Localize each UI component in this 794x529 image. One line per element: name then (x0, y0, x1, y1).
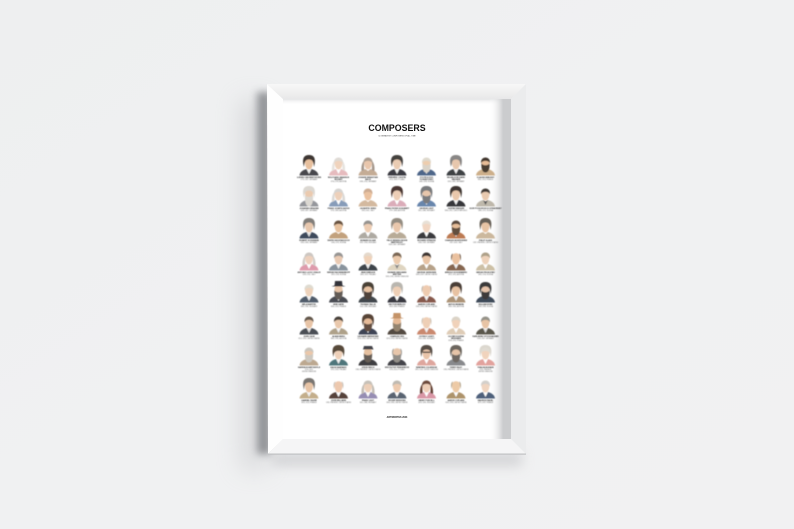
composer: Bernstein (357, 314, 379, 340)
composer: Berg: ALBAN BERG (332, 335, 345, 338)
composer: Maurice Ravel: 1875–1937, FRANCE (478, 401, 493, 404)
composer: Rachmaninoff (327, 252, 351, 276)
composer: Tchaikovsky: TCHAIKOVSKY (420, 178, 434, 181)
composer: Vivaldi (298, 252, 321, 276)
composer: Ives (386, 313, 408, 340)
composer: Verdi (358, 188, 378, 212)
composer: Schumann (299, 218, 319, 244)
composer: Liszt (417, 186, 436, 212)
composer: Schoenberg: ARNOLD SCHOENBERG (445, 271, 468, 274)
composer: Penderecki: KRZYSZTOF PENDERECKI (385, 367, 410, 369)
composer: Mendelssohn (387, 218, 408, 246)
composer: Ives: CHARLES IVES (390, 335, 405, 338)
composer: Stravinsky: IGOR FYODOROVICH STRAVINSKY (469, 207, 502, 210)
composer: Mozart: WOLFGANG AMADEUS (328, 176, 350, 179)
composer: Schoenberg (445, 253, 468, 276)
composer: Philip Glass: PHILIP GLASS (479, 239, 493, 242)
composer: Messiaen: OLIVIER EUGÈNE (448, 335, 465, 338)
composer: Aaron Copland portrait (445, 381, 467, 404)
composer: Gershwin: 1898–1937, UNITED STATES (416, 273, 437, 276)
composer: Stravinsky (469, 188, 502, 212)
composer: Sibelius: 1865–1957, FINLAND (360, 273, 377, 276)
composer: Satie: ERIK SATIE (333, 303, 344, 306)
composer: Schubert: 1797–1828, AUSTRIA (389, 209, 406, 212)
composer: Saariaho: KAIJA SAARIAHO (330, 366, 347, 369)
composer: Liszt: 1811–1886, HUNGARY (418, 209, 436, 212)
composer: Bach: BACH (365, 178, 371, 181)
composer: Elgar: EDWARD ELGAR (360, 239, 376, 242)
composer: Coleridge: 1875–1912, UNITED KINGDOM (415, 369, 439, 371)
composer: Prokofiev (476, 252, 496, 276)
composer: Beethoven (297, 155, 322, 181)
composer: Copland: AARON COPLAND (418, 303, 436, 306)
composer: Rachmaninoff: SERGEI RACHMANINOFF (327, 271, 351, 274)
composer: Tchaikovsky: 1840–1893, RUSSIA (419, 180, 435, 183)
composer: Prokofiev: SERGEI PROKOFIEV (476, 272, 496, 274)
composer: Musgrave (476, 345, 495, 373)
composer: Berg: 1885–1935, AUSTRIA (331, 337, 347, 340)
composer: Sessions (386, 380, 408, 404)
composer: Shostakovich: 1906–1975, RUSSIA (331, 241, 347, 244)
composer: Schumann: ROBERT SCHUMANN (299, 239, 319, 242)
composer: Tallis (358, 282, 378, 308)
composer: Ives: 1874–1954, UNITED STATES (386, 337, 408, 340)
composer: Purcell: 1659–1695, ENGLAND (418, 401, 436, 404)
composer: Mozart: 1756–1791, AUSTRIA (331, 180, 347, 183)
composer: John Cage: 1912–1992, UNITED STATES (298, 337, 320, 340)
composer: Mozart: MOZART (334, 178, 343, 181)
composer: Saariaho (329, 345, 348, 371)
composer: John Williams: JOHN WILLIAMS (331, 399, 347, 402)
composer: Liszt: GEORGE LISZT (419, 208, 434, 210)
composer: Shostakovich: DMITRI SHOSTAKOVICH (327, 239, 350, 242)
composer: Wagner: WILHELM RICHARD (447, 176, 466, 179)
composer: Schumann: 1810–1856, GERMANY (301, 241, 318, 244)
composer: Franz Liszt: FRANZ LISZT (362, 399, 375, 402)
composer: Strauss (417, 220, 436, 244)
composer: Birtwistle: 1934–2022, (305, 369, 314, 371)
composer: Britten: EDWARD BENJAMIN (388, 271, 407, 274)
frame: left bevel (267, 84, 283, 454)
composer: Prokofiev: 1891–1953, RUSSIA (478, 273, 494, 276)
composer: Schubert: FRANZ PETER SCHUBERT (385, 207, 410, 210)
composer: Gershwin (416, 252, 437, 276)
poster sheet (283, 99, 503, 439)
composer: Fauré: GABRIEL FAURÉ (301, 399, 317, 402)
composer: Bartok: 1881–1945, HUNGARY (301, 305, 318, 308)
composer: Britten: 1913–1976, UNITED KINGDOM (386, 276, 409, 278)
composer: Debussy: 1862–1918, FRANCE (478, 178, 493, 181)
composer: Copland (416, 285, 437, 308)
composer: Reich: 1936–PRESENT, UNITED STATES (355, 368, 381, 371)
composer: Byrd (476, 282, 495, 308)
composer: Mahler: GUSTAV MAHLER (448, 207, 465, 210)
composer: Birtwistle: HARRISON BIRTWISTLE (298, 366, 321, 369)
composer: Musgrave: UNITED KINGDOM (478, 371, 493, 373)
composer: Terry Riley: TERRY RILEY (450, 367, 463, 369)
composer: Monteverdi (445, 220, 468, 244)
composer: Stockhausen (472, 316, 499, 340)
composer: Franz Liszt (358, 380, 378, 404)
composer: Birtwistle: UNITED KINGDOM (302, 371, 317, 373)
composer: Messiaen (446, 316, 466, 342)
composer: Sibelius: JEAN SIBELIUS (361, 271, 376, 274)
composer: Bach (358, 158, 378, 183)
composer: Mendelssohn: BARTHOLDY (391, 241, 404, 244)
composer: Schoenberg: 1874–1951, AUSTRIA (448, 273, 465, 276)
composer: Berlioz (388, 282, 406, 308)
composer: Sibelius (358, 252, 378, 276)
composer: Webern: ANTON WEBERN (448, 303, 464, 306)
composer: Stockhausen: KARLHEINZ STOCKHAUSEN (472, 335, 499, 338)
composer: Britten: BRITTEN (393, 274, 402, 276)
composer: John Cage: JOHN CAGE (303, 335, 315, 338)
composer: Bach: 1685–1750, GERMANY (360, 180, 377, 183)
composer: Verdi: 1813–1901, ITALY (361, 209, 375, 212)
composer: Maurice Ravel (476, 380, 495, 404)
composer: Vivaldi: 1678–1741, ITALY (302, 273, 316, 276)
composer: Reich (355, 346, 381, 371)
composer: Philip Glass (473, 218, 498, 244)
composer: Wagner: WAGNER (452, 178, 461, 181)
picture frame (267, 84, 526, 455)
composer: Messiaen: MESSIAEN (451, 337, 462, 340)
composer: Copland: 1900–1990, UNITED STATES (416, 305, 437, 308)
composer: Tallis: 1505–1585, ENGLAND (360, 305, 377, 308)
composers grid (297, 155, 502, 404)
composer: John Williams: 1932–PRESENT, UNITED STATES (326, 401, 351, 404)
composer: Brahms: JOHANNES BRAHMS (299, 207, 319, 210)
composer: Aaron Copland portrait: 1900–1990, UNITED STATES (445, 401, 467, 404)
title: COMPOSERS (368, 123, 426, 133)
composer: Bartok (300, 284, 318, 308)
composer: Satie (329, 281, 348, 308)
composer: Beethoven: 1770–1827, GERMANY (301, 178, 318, 181)
composer: Philip Glass: 1937–PRESENT, UNITED STATES (473, 241, 498, 244)
composer: Stockhausen: 1928–2007, GERMANY (477, 337, 495, 340)
frame: right inner shadow strip (503, 99, 511, 439)
composer: Mendelssohn: 1809–1847, GERMANY (389, 243, 406, 246)
frame: top bevel (267, 84, 526, 99)
frame drop shadow (257, 92, 271, 454)
composer: Coleridge: WINIFRED COLERIDGE (416, 367, 438, 369)
composer: Haydn: 1732–1809, AUSTRIA (331, 209, 347, 212)
composer: Chopin (388, 155, 406, 181)
composer: Debussy: CLAUDE DEBUSSY (477, 176, 495, 179)
composer: Strauss: RICHARD STRAUSS (417, 239, 436, 242)
composer: Penderecki (385, 348, 410, 371)
composer: Tallis: THOMAS TALLIS (360, 303, 376, 306)
composer: Chopin: 1810–1849, POLAND (389, 178, 406, 181)
composer: Stravinsky: 1882–1971, RUSSIA (478, 209, 494, 212)
composer: Tchaikovsky (417, 158, 436, 183)
composer: Rachmaninoff: 1873–1943, RUSSIA (331, 273, 347, 276)
composer: Mendelssohn: FELIX MENDELSSOHN (387, 240, 408, 242)
composer: Fauré (300, 378, 318, 404)
composer: Mozart (328, 158, 350, 183)
composer: Musgrave: THEA MUSGRAVE (477, 366, 494, 369)
composer: Terry Riley: 1935–PRESENT, UNITED STATES (443, 368, 469, 371)
composer: Byrd: WILLIAM BYRD (479, 303, 493, 306)
composer: Satie: 1866–1925, FRANCE (331, 305, 346, 308)
composer: Messiaen: 1908–1992, FRANCE (448, 339, 464, 342)
composer: Penderecki: 1933–2020, POLAND (389, 368, 406, 371)
composer: Chopin: FRÉDÉRIC CHOPIN (388, 176, 406, 179)
composer: Haydn (328, 188, 350, 212)
footer credit: ARTWORTHS 2023 (387, 416, 408, 419)
composer: Berg (329, 316, 348, 340)
composer: Haydn: FRANZ JOSEPH HAYDN (328, 207, 350, 210)
composer: Ligeti: 1923–2006, HUNGARY (418, 337, 436, 340)
composer: Webern (446, 282, 466, 308)
composer: Brahms: 1833–1897, GERMANY (301, 209, 318, 212)
composer: Brahms (299, 186, 319, 212)
composer: Strauss: 1864–1949, GERMANY (418, 241, 436, 244)
composer: Britten (386, 252, 409, 278)
composer: John Williams (326, 381, 351, 404)
composer: Saariaho: 1952–2023, FINLAND (331, 368, 347, 371)
composer: Monteverdi: CHARLES MONTEVERDI (445, 239, 468, 242)
composer: Vivaldi: ANTONIO LUCIO VIVALDI (298, 271, 321, 274)
composer: Berlioz: HECTOR BERLIOZ (389, 304, 406, 306)
subtitle: 50 GREATEST COMPOSERS OF ALL TIME (378, 134, 416, 138)
composer: Beethoven: LUDWIG VAN BEETHOVEN (297, 176, 322, 179)
composer: Debussy (476, 158, 495, 181)
composer: Bach: JOHANN SEBASTIAN (358, 176, 378, 179)
composer: Franz Liszt: 1811–1886, HUNGARY (360, 401, 377, 404)
composer: Verdi: GIUSEPPE VERDI (360, 208, 376, 210)
composer: Maurice Ravel: MAURICE RAVEL (478, 399, 494, 402)
composer: Bartok: BÉLA BARTÓK (302, 303, 316, 306)
composer: Byrd: 1839–1881, RUSSIA (478, 305, 494, 308)
composer: Ligeti (417, 317, 436, 340)
composer: John Cage (298, 316, 320, 340)
composer: Webern: 1883–1945, AUSTRIA (448, 305, 465, 308)
composer: Aaron Copland portrait: AARON COPLAND (448, 399, 465, 402)
composer: Purcell (417, 380, 436, 404)
composer: Schubert (385, 186, 410, 212)
composer: Wagner: 1813–1883, GERMANY (448, 180, 465, 183)
composer: Reich: STEVE REICH (362, 367, 375, 369)
composer: Mahler (445, 186, 468, 212)
composer: Wagner (446, 155, 466, 183)
composer: Gershwin: GEORGE GERSHWIN (417, 272, 437, 274)
composer: Elgar: 1857–1934, ENGLAND (360, 241, 377, 244)
composer: Sessions: 1896–1985, UNITED STATES (386, 401, 408, 404)
composer: Bernstein: LEONARD BERNSTEIN (358, 335, 379, 338)
composer: Fauré: 1845–1924, FRANCE (301, 401, 317, 404)
composer: Elgar (358, 220, 378, 244)
composer: Mahler: 1860–1911, CZECH REPUBLIC (445, 210, 468, 212)
frame: right bevel (511, 84, 526, 454)
composer: Ligeti: GYÖRGY LIGETI (419, 335, 434, 338)
composer: Terry Riley (443, 345, 469, 371)
composer: Shostakovich (327, 220, 350, 244)
composer: Purcell: HENRY PURCELL (419, 400, 435, 402)
composer: Bernstein: 1918–1990, UNITED STATES (357, 337, 379, 340)
composer: Birtwistle (298, 348, 321, 373)
composer: Musgrave: 1928–PRESENT, (479, 369, 492, 371)
composer: Coleridge (415, 345, 439, 371)
composer: Sessions: ROGER SESSIONS (388, 400, 406, 402)
composer: Monteverdi: 1567–1643, ITALY (449, 241, 463, 244)
composer: Berlioz: 1803–1869, FRANCE (389, 305, 405, 308)
frame: bottom bevel (268, 439, 526, 454)
composer: Tchaikovsky: PYOTR ILYICH (420, 177, 434, 179)
